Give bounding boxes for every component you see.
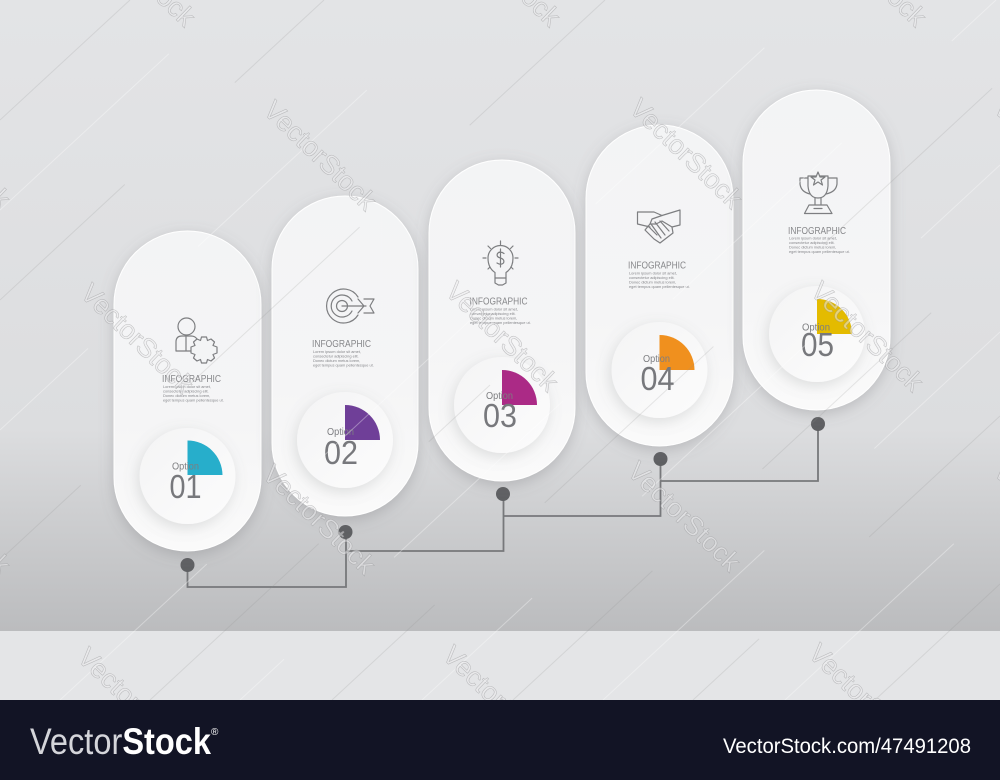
number: 01 <box>170 468 202 505</box>
body text: consectetur adipiscing elit. <box>629 275 675 280</box>
body text: Lorem ipsum dolor sit amet, <box>313 349 361 354</box>
body text: eget tempus quam pellentesque ut. <box>789 249 850 254</box>
body text: Lorem ipsum dolor sit amet, <box>629 270 677 276</box>
option label: Option <box>486 391 513 402</box>
footer logo: VectorStock <box>30 721 211 762</box>
body text: eget tempus quam pellentesque ut. <box>470 320 531 325</box>
body text <box>789 236 850 254</box>
option label: Option <box>643 354 670 365</box>
body text <box>470 306 531 325</box>
connector lines <box>188 424 818 587</box>
option disc <box>140 428 236 524</box>
option label: Option <box>802 322 830 334</box>
heading: INFOGRAPHIC <box>470 296 528 308</box>
connector dots <box>180 417 825 572</box>
body text: consectetur adipiscing elit. <box>470 311 516 316</box>
body text: eget tempus quam pellentesque ut. <box>163 398 224 402</box>
watermark repeats: VectorStock <box>440 276 565 398</box>
option disc <box>612 322 708 418</box>
option label: Option <box>172 462 199 472</box>
watermark repeats: VectorStock <box>622 456 747 578</box>
body text <box>163 384 224 402</box>
watermark repeats: VectorStock <box>437 640 562 762</box>
icon: trophy <box>800 172 837 214</box>
heading: INFOGRAPHIC <box>312 339 371 350</box>
number: 05 <box>801 326 834 363</box>
body text <box>629 270 690 289</box>
option disc <box>454 357 550 453</box>
watermark repeats: VectorStock <box>624 93 749 215</box>
body text: Lorem ipsum dolor sit amet, <box>789 236 837 240</box>
watermark repeats: VectorStock <box>75 278 200 400</box>
icon: handshake <box>638 210 680 243</box>
body text: Donec dictum metus lorem, <box>789 244 836 250</box>
watermark repeats: VectorStock <box>258 95 383 217</box>
body text: Donec dictum metus lorem, <box>470 316 517 320</box>
number: 02 <box>324 434 358 471</box>
watermark repeats: VectorStock <box>805 276 930 398</box>
number: 03 <box>483 397 517 434</box>
watermark repeats: VectorStock <box>257 459 382 581</box>
body text: consectetur adipiscing elit. <box>313 354 359 358</box>
pie wedge <box>817 299 852 334</box>
body text: consectetur adipiscing elit. <box>163 388 209 394</box>
body text: consectetur adipiscing elit. <box>789 240 835 245</box>
icon: light bulb with dollar <box>483 241 518 285</box>
footer registered mark: ® <box>211 727 219 738</box>
option disc <box>297 392 393 488</box>
heading: INFOGRAPHIC <box>628 260 686 272</box>
body text: Donec dictum metus lorem, <box>313 358 360 363</box>
watermark repeats: VectorStock <box>72 642 197 764</box>
panel: card 05 <box>743 90 890 410</box>
body text: Lorem ipsum dolor sit amet, <box>163 384 211 389</box>
panel: card 01 <box>114 231 261 551</box>
body text <box>313 349 374 368</box>
icon: person with gear <box>176 318 217 363</box>
number: 04 <box>640 360 674 397</box>
watermark repeats: VectorStock <box>803 638 928 760</box>
body text: eget tempus quam pellentesque ut. <box>313 362 374 368</box>
pie wedge <box>502 370 537 405</box>
pie wedge <box>660 335 694 370</box>
panel: card 04 <box>586 125 733 446</box>
body text: Donec dictum metus lorem, <box>629 280 676 284</box>
pie wedge <box>345 405 380 440</box>
option disc <box>769 286 865 382</box>
body text: Donec dictum metus lorem, <box>163 393 210 398</box>
heading: INFOGRAPHIC <box>162 374 221 385</box>
panel: card 03 <box>429 160 575 481</box>
body text: Lorem ipsum dolor sit amet, <box>470 306 518 312</box>
panel: card 02 <box>272 196 418 516</box>
floor band <box>0 631 1000 700</box>
footer url: VectorStock.com/47491208 <box>723 735 971 758</box>
pie wedge <box>188 440 222 475</box>
body text: eget tempus quam pellentesque ut. <box>629 284 690 289</box>
heading: INFOGRAPHIC <box>788 226 846 237</box>
icon: target with arrow <box>327 289 374 323</box>
option label: Option <box>327 427 354 438</box>
footer bar <box>0 700 1000 780</box>
